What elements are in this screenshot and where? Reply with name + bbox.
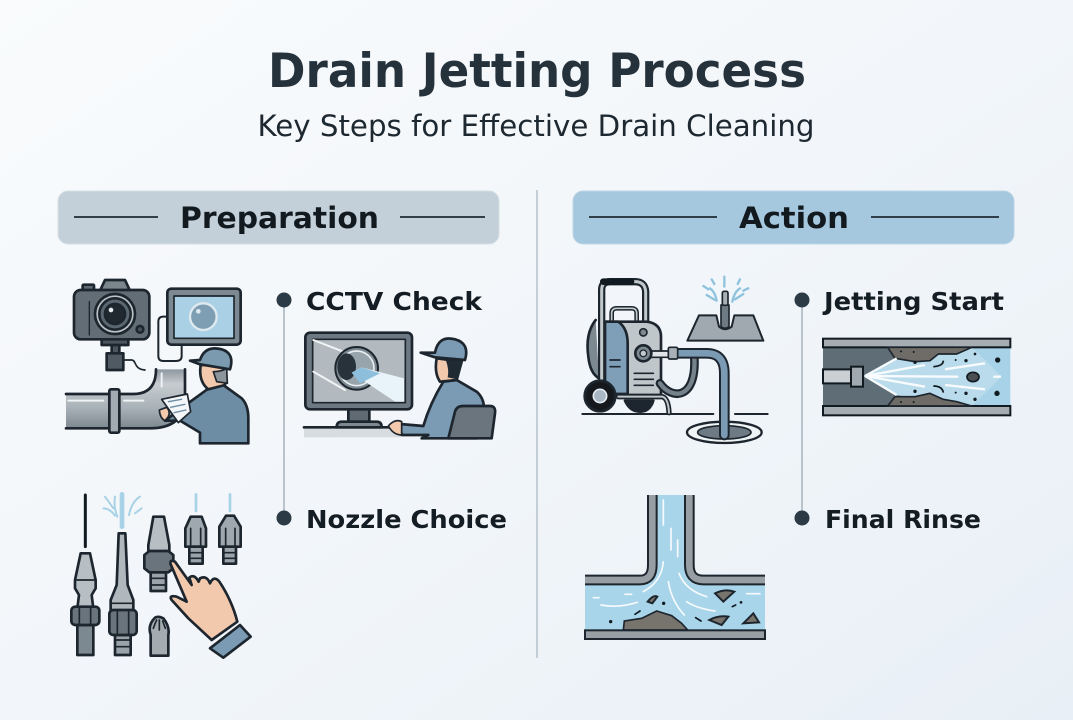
icon: camera, monitor, pipe and technician — [66, 280, 248, 443]
icon: nozzle selection with hand — [71, 494, 251, 658]
timeline: preparation — [276, 292, 292, 526]
label: Jetting Start: Jetting Start — [822, 287, 1004, 316]
icon: technician at monitor — [304, 333, 495, 438]
center divider — [536, 190, 538, 658]
icon: jetting machine and nozzle — [582, 277, 768, 443]
title: Drain Jetting Process — [268, 44, 806, 99]
panel header: Preparation — [58, 191, 499, 244]
panel header: Preparation: Preparation — [180, 201, 379, 235]
icon: pipe jetting cross-section — [823, 339, 1010, 415]
panel header: Action — [573, 191, 1014, 244]
icon: final rinse pipe junction — [585, 495, 765, 639]
label: Final Rinse: Final Rinse — [825, 505, 981, 534]
panel header: Action: Action — [739, 201, 849, 235]
label: Nozzle Choice: Nozzle Choice — [306, 505, 507, 534]
timeline: action — [794, 292, 810, 526]
label: CCTV Check: CCTV Check — [306, 287, 483, 316]
subtitle: Key Steps for Effective Drain Cleaning — [258, 109, 814, 143]
